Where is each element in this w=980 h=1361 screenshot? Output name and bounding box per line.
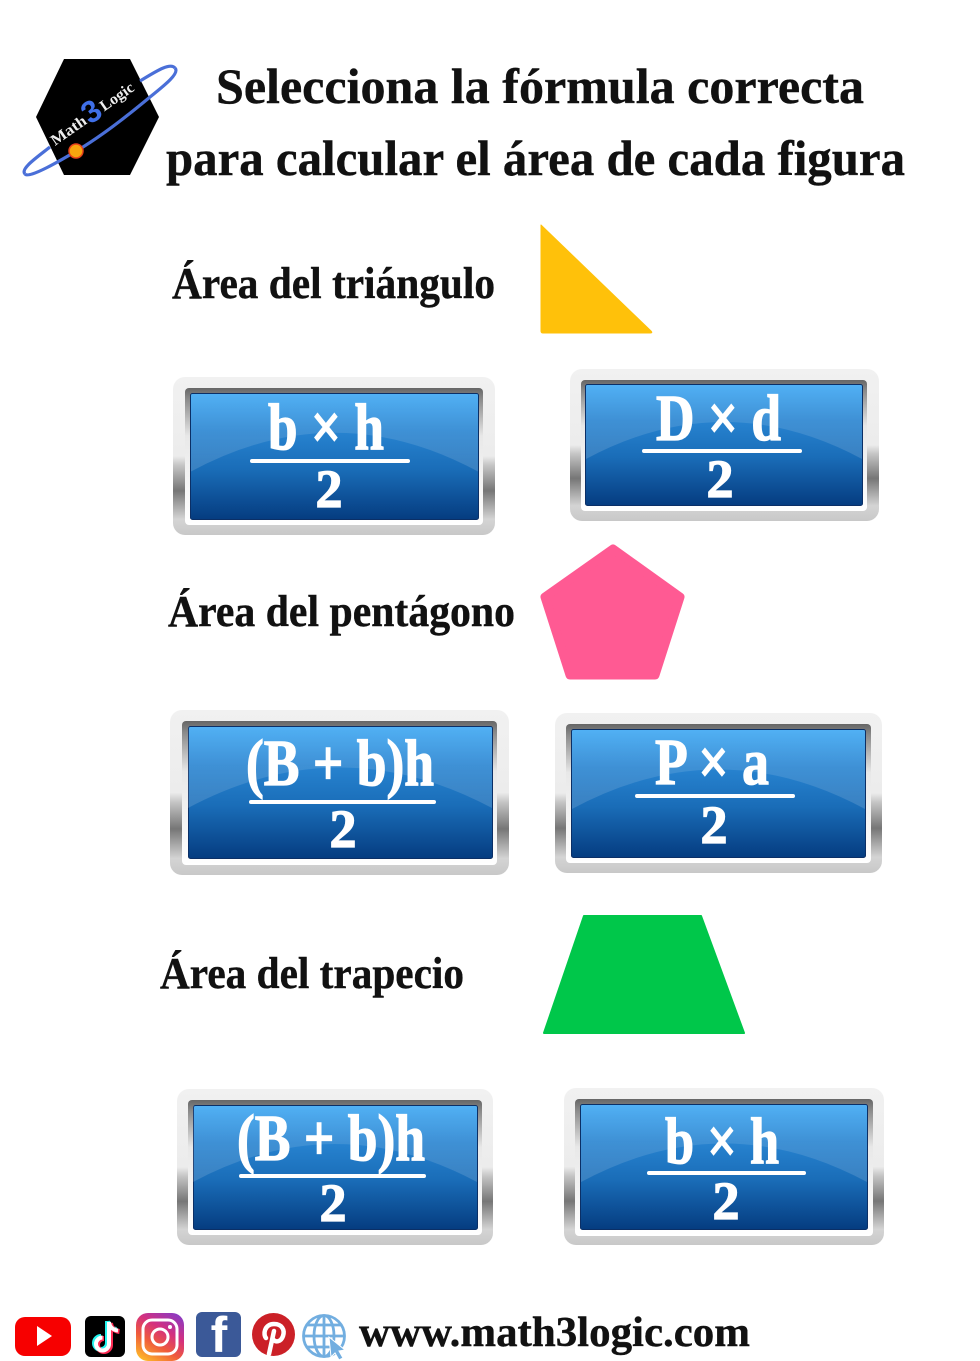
button: trapezoid option (B+b)h/2 — [177, 1089, 493, 1245]
heading: triangle: Área del triángulo — [172, 259, 495, 308]
button: triangle option D×d/2: D × d — [656, 382, 781, 455]
shape: pink pentagon — [545, 549, 680, 675]
button: trapezoid option b×h/2 — [564, 1088, 884, 1245]
button: trapezoid option b×h/2: b × h — [665, 1105, 779, 1178]
title: Selecciona la fórmula correcta — [216, 58, 864, 114]
button: pentagon option (B+b)h/2: (B + b)h — [246, 727, 434, 800]
logo hexagon — [36, 59, 159, 175]
icon: youtube — [15, 1317, 71, 1356]
shape: green trapezoid — [544, 916, 744, 1033]
logo orange ball — [69, 144, 83, 158]
logo wordmark: 3 — [74, 92, 108, 131]
heading: pentagon: Área del pentágono — [168, 587, 515, 636]
button: trapezoid option b×h/2: 2 — [712, 1171, 740, 1231]
button: triangle option b×h/2: b × h — [268, 391, 384, 464]
title: para calcular el área de cada figura — [166, 130, 905, 186]
icon: globe with cursor — [304, 1316, 345, 1360]
logo orbit back arc — [24, 66, 175, 174]
logo wordmark: Math — [48, 112, 90, 149]
button: triangle option D×d/2: 2 — [706, 449, 734, 509]
icon: pinterest — [252, 1313, 295, 1356]
social icons row — [15, 1307, 345, 1361]
website url: www.math3logic.com — [359, 1310, 750, 1356]
heading: trapezoid: Área del trapecio — [160, 949, 464, 998]
icon: instagram — [136, 1313, 184, 1361]
logo orbit front arc — [25, 68, 176, 175]
button: pentagon option (B+b)h/2 — [170, 710, 509, 875]
button: triangle option b×h/2: 2 — [316, 459, 342, 519]
logo wordmark: Logic — [97, 79, 138, 115]
button: pentagon option (B+b)h/2: 2 — [330, 799, 356, 859]
button: pentagon option P×a/2 — [555, 713, 882, 873]
button: pentagon option P×a/2: 2 — [700, 795, 728, 855]
shape: yellow triangle — [541, 225, 652, 333]
title — [166, 58, 905, 186]
button: pentagon option P×a/2: P × a — [655, 726, 769, 799]
button: trapezoid option (B+b)h/2: (B + b)h — [237, 1102, 425, 1175]
logo wordmark — [41, 69, 141, 154]
button: triangle option b×h/2 — [173, 377, 495, 535]
logo — [24, 59, 176, 175]
icon: tiktok — [85, 1316, 125, 1357]
button: triangle option D×d/2 — [570, 369, 879, 521]
button: trapezoid option (B+b)h/2: 2 — [320, 1173, 346, 1233]
icon: facebook — [196, 1307, 241, 1361]
